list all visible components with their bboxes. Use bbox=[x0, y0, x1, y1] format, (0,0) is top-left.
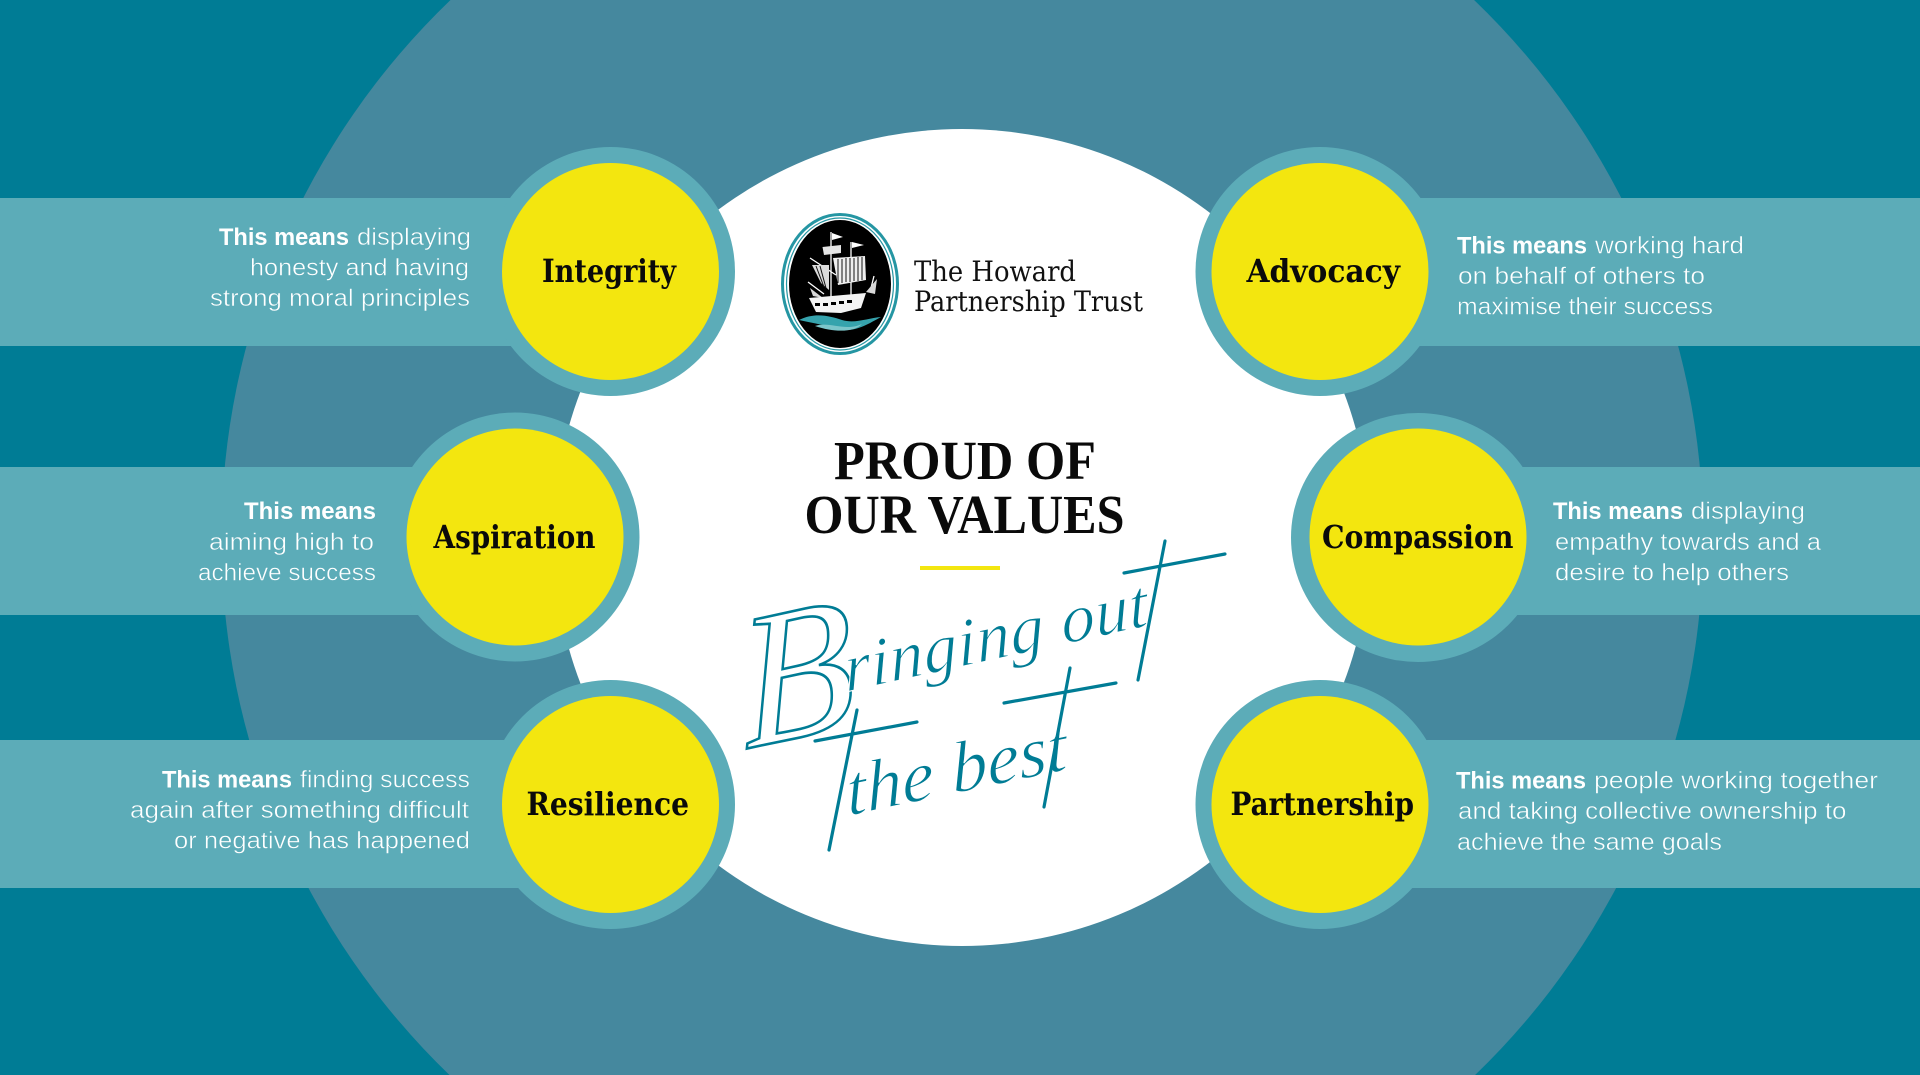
description: empathy towards and a bbox=[1555, 529, 1821, 556]
band bbox=[1320, 740, 1920, 888]
description: This means bbox=[219, 224, 349, 251]
tagline: Bringing out the best bbox=[732, 490, 1225, 850]
description: maximise their success bbox=[1457, 294, 1713, 320]
wordmark: Partnership Trust bbox=[914, 285, 1144, 318]
yellow disc bbox=[1212, 696, 1428, 913]
script line 1: ringing out bbox=[841, 564, 1152, 707]
description: This means bbox=[162, 766, 292, 794]
description: people working together bbox=[1594, 768, 1878, 794]
description: and taking collective ownership to bbox=[1458, 798, 1846, 825]
yellow disc bbox=[1212, 163, 1428, 380]
yellow divider bbox=[920, 566, 1000, 570]
description: finding success bbox=[300, 766, 470, 794]
description: or negative has happened bbox=[174, 828, 470, 854]
band bbox=[0, 467, 515, 615]
description: working hard bbox=[1594, 232, 1744, 260]
ring bbox=[1196, 680, 1444, 929]
panel: Aspiration bbox=[0, 412, 640, 662]
description: again after something difficult bbox=[130, 797, 469, 824]
heading: Aspiration bbox=[433, 518, 596, 556]
wordmark bbox=[914, 255, 1144, 318]
description: displaying bbox=[1691, 498, 1805, 525]
band bbox=[1418, 467, 1920, 615]
panel: Partnership bbox=[1196, 680, 1920, 929]
ring bbox=[1291, 413, 1545, 662]
ring bbox=[390, 412, 640, 662]
panel: Compassion bbox=[1291, 413, 1920, 662]
description: This means bbox=[1456, 768, 1586, 794]
description: This means bbox=[1553, 498, 1683, 525]
description: This means bbox=[244, 498, 376, 525]
panel: Advocacy bbox=[1196, 147, 1920, 396]
description bbox=[130, 766, 470, 854]
logo: The Howard Partnership Trust bbox=[782, 214, 1144, 354]
band bbox=[1320, 198, 1920, 346]
description: honesty and having bbox=[250, 254, 469, 282]
panel: Resilience bbox=[0, 680, 735, 929]
description: This means bbox=[1457, 232, 1587, 260]
heading: Compassion bbox=[1322, 518, 1514, 556]
heading: Partnership bbox=[1230, 785, 1414, 823]
description bbox=[198, 498, 376, 586]
wordmark: The Howard bbox=[914, 255, 1076, 288]
ring bbox=[1196, 147, 1444, 396]
band bbox=[0, 198, 610, 346]
yellow disc bbox=[1310, 428, 1526, 646]
description bbox=[1457, 232, 1744, 320]
description: on behalf of others to bbox=[1458, 263, 1705, 290]
description bbox=[1553, 498, 1821, 586]
description: strong moral principles bbox=[210, 285, 470, 312]
ring bbox=[486, 147, 735, 396]
band bbox=[0, 740, 610, 888]
description: aiming high to bbox=[209, 529, 374, 556]
script line 1: B bbox=[732, 555, 862, 791]
title: PROUD OF bbox=[834, 430, 1096, 491]
large muted circle bbox=[221, 0, 1703, 1075]
yellow disc bbox=[502, 696, 719, 913]
title: OUR VALUES bbox=[804, 484, 1124, 545]
yellow disc bbox=[406, 428, 624, 646]
flourishes bbox=[815, 541, 1225, 850]
white central circle bbox=[554, 129, 1370, 946]
description: achieve the same goals bbox=[1457, 829, 1722, 856]
ring bbox=[486, 680, 735, 929]
panel: Integrity bbox=[0, 147, 735, 396]
title bbox=[804, 430, 1124, 545]
icon: ship crest bbox=[782, 214, 898, 354]
heading: Advocacy bbox=[1246, 252, 1401, 290]
description: displaying bbox=[357, 224, 471, 251]
description: achieve success bbox=[198, 560, 376, 586]
description bbox=[1456, 768, 1878, 856]
description: desire to help others bbox=[1555, 560, 1789, 586]
yellow disc bbox=[502, 163, 719, 380]
description bbox=[210, 224, 471, 312]
script line 2: the best bbox=[844, 705, 1071, 832]
heading: Resilience bbox=[526, 785, 689, 823]
heading: Integrity bbox=[542, 252, 677, 290]
